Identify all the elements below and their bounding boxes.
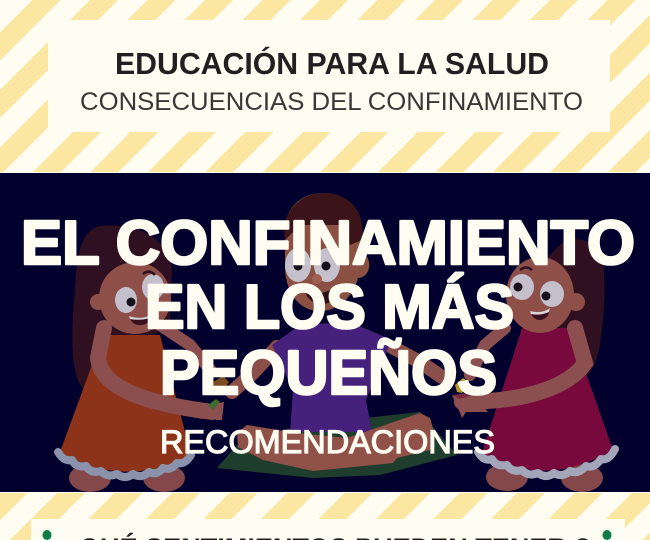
- illustration: girl in magenta dress: [452, 239, 615, 492]
- main title: EL CONFINAMIENTO: [21, 209, 635, 278]
- panel: header: [48, 20, 610, 132]
- icon: left green pin: [42, 530, 52, 540]
- icon: right green pin: [602, 530, 612, 540]
- panel: next section: [31, 519, 625, 540]
- panel: dark hero banner: [0, 172, 650, 493]
- subtitle: recommendations: RECOMENDACIONES: [160, 424, 495, 460]
- heading: education for health: EDUCACIÓN PARA LA SALUD: [115, 45, 549, 81]
- main title: [21, 209, 635, 408]
- main title: PEQUEÑOS: [160, 339, 497, 408]
- main title: EN LOS MÁS: [145, 273, 514, 342]
- illustration: girl in orange dress: [58, 225, 229, 492]
- illustration: boy sitting: [217, 193, 457, 478]
- subheading: consequences of confinement: CONSECUENCIAS DEL CONFINAMIENTO: [80, 88, 583, 116]
